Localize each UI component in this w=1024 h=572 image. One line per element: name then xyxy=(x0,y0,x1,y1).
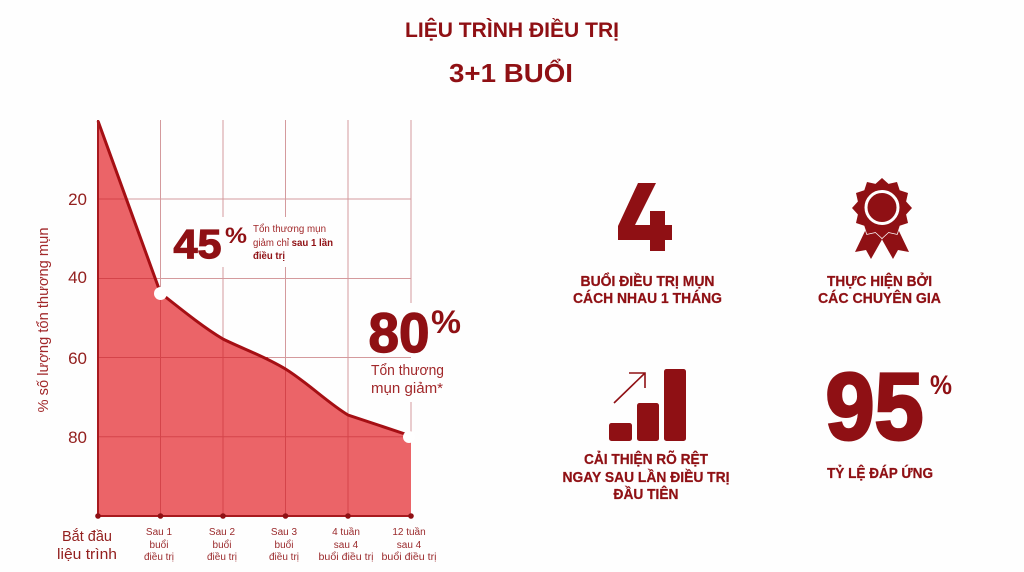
stat: 4 sessions xyxy=(573,183,722,307)
stat: 95 percent response: TỶ LỆ ĐÁP ỨNG xyxy=(827,464,933,482)
y axis title: % số lượng tổn thương mụn xyxy=(35,228,52,412)
marker at 45 percent xyxy=(154,287,167,300)
x axis labels: 4 tuần xyxy=(332,526,360,538)
x axis labels: buổi xyxy=(150,539,168,551)
x axis labels: sau 4 xyxy=(334,540,359,551)
axis dots xyxy=(95,513,414,519)
callout: 80 percent: mụn giảm* xyxy=(371,381,443,397)
grid lines over area xyxy=(98,199,411,516)
stat: performed by specialists: CÁC CHUYÊN GIA xyxy=(818,289,942,307)
y axis ticks: 20 xyxy=(68,190,87,209)
y axis ticks xyxy=(68,190,87,447)
left and bottom axis xyxy=(98,120,411,516)
x axis labels: Sau 2 xyxy=(209,527,236,538)
stat: clear improvement xyxy=(562,369,730,503)
x axis labels: 12 tuần xyxy=(392,526,426,538)
y axis ticks: 60 xyxy=(68,349,87,368)
title: 3+1 BUỔI xyxy=(449,58,573,88)
x axis labels: Bắt đầu xyxy=(62,528,112,545)
callout: 45 percent xyxy=(174,221,333,267)
y axis ticks: 40 xyxy=(68,268,87,287)
callout: 45 percent: % xyxy=(225,223,247,248)
callout: 80 percent: 80 xyxy=(368,301,430,364)
x axis labels: buổi xyxy=(275,539,293,551)
stat: clear improvement: ĐẦU TIÊN xyxy=(614,485,678,503)
callout: 45 percent: Tổn thương mụn xyxy=(253,223,326,235)
icon: rising bars with arrow xyxy=(609,369,686,441)
stat: clear improvement: NGAY SAU LẦN ĐIỀU TRỊ xyxy=(562,469,730,486)
callout: 45 percent: giảm chỉ sau 1 lần xyxy=(253,237,333,249)
area under the curve xyxy=(98,121,411,516)
icon: award rosette xyxy=(852,178,912,259)
callout: 80 percent: % xyxy=(431,304,461,340)
x axis labels: điều trị xyxy=(144,551,174,563)
callout: 80 percent xyxy=(368,301,461,397)
stat: clear improvement: CẢI THIỆN RÕ RỆT xyxy=(584,450,708,468)
chart: acne lesion reduction xyxy=(95,120,415,519)
x axis labels: buổi điều trị xyxy=(382,551,436,563)
marker at 80 percent xyxy=(403,431,415,443)
stat: 95 percent response xyxy=(826,354,952,482)
number 4 xyxy=(618,183,672,251)
x axis labels: Sau 3 xyxy=(271,527,298,538)
y axis ticks: 80 xyxy=(68,428,87,447)
callout: 80 percent: Tổn thương xyxy=(371,363,444,379)
x axis labels: điều trị xyxy=(207,551,237,563)
x axis labels: điều trị xyxy=(269,551,299,563)
stat: performed by specialists: THỰC HIỆN BỞI xyxy=(827,272,932,290)
x axis labels: liệu trình xyxy=(57,546,117,563)
x axis labels: Sau 1 xyxy=(146,527,173,538)
x axis labels: buổi điều trị xyxy=(318,551,374,563)
stat: 95 percent response: 95 xyxy=(826,354,924,460)
x axis labels: sau 4 xyxy=(397,540,422,551)
curve line xyxy=(98,121,411,436)
grid lines xyxy=(127,120,411,436)
x axis labels xyxy=(57,526,436,563)
title: LIỆU TRÌNH ĐIỀU TRỊ xyxy=(405,18,619,42)
x axis labels: buổi xyxy=(213,539,231,551)
stat: 4 sessions: CÁCH NHAU 1 THÁNG xyxy=(573,290,722,307)
stat: 4 sessions: BUỔI ĐIỀU TRỊ MỤN xyxy=(580,272,714,290)
callout: 45 percent: điều trị xyxy=(253,250,285,262)
stat: performed by specialists xyxy=(818,178,942,307)
title xyxy=(405,18,619,88)
callout: 45 percent: 45 xyxy=(174,221,222,267)
stat: 95 percent response: % xyxy=(930,370,952,400)
